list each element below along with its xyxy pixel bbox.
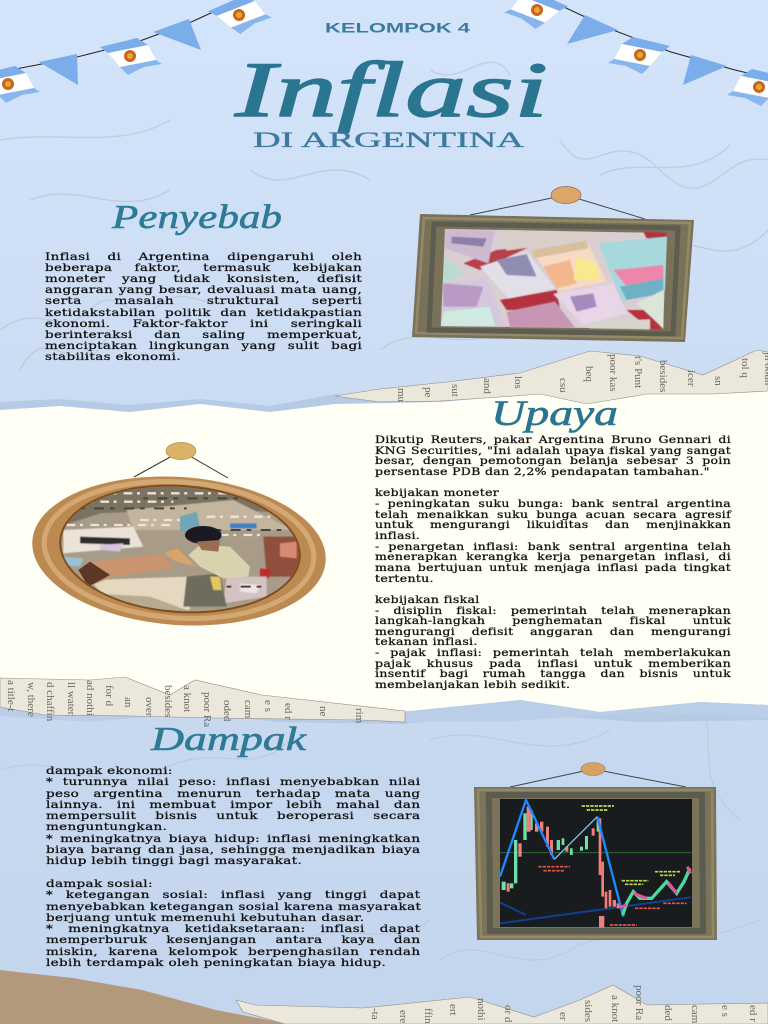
text block: dampak: peso argentina menurun terhadap mata uang [46, 788, 420, 800]
background and torn paper: e s [262, 700, 274, 712]
paper strip bottom [236, 985, 768, 1024]
text block: upaya: Dikutip Reuters, pakar Argentina Bruno Gennari di [375, 434, 731, 446]
background and torn paper: mu [395, 388, 407, 403]
text block: dampak: lainnya. ini membuat impor lebih mahal dan [46, 799, 420, 811]
text block: penyebab: stabilitas ekonomi. [45, 351, 181, 363]
background and torn paper: ere [397, 1010, 409, 1024]
background and torn paper: t's Punt [632, 356, 644, 388]
background and torn paper: ad nothi [84, 680, 96, 716]
text block: dampak: menguntungkan. [46, 821, 167, 833]
text block: penyebab: berinteraksi dan saling memperkuat, [45, 329, 362, 341]
text block: upaya [375, 434, 732, 691]
text block: dampak: berjuang untuk memenuhi kebutuhan dasar. [46, 912, 364, 924]
text block: upaya: menerapkan kerangka kerja penargetan inflasi, di [375, 551, 731, 563]
background and torn paper: poor Ra [633, 985, 645, 1020]
text block: upaya: mengurangi defisit anggaran dan mengurangi [375, 626, 731, 638]
paper strip middle [0, 677, 405, 722]
text block: upaya: mana bertujuan untuk menjaga inflasi pada tingkat [375, 562, 731, 574]
cream panel [0, 390, 768, 716]
text block: dampak: miskin, karena kelompok berpenghasilan rendah [46, 946, 420, 958]
background and torn paper: ded [662, 1005, 674, 1021]
text block: penyebab: serta masalah struktural seperti [45, 295, 362, 307]
text block: upaya: langkah-langkah penghematan fiskal untuk [375, 615, 731, 627]
background and torn paper: tol q [739, 358, 751, 378]
text block: upaya: membelanjakan lebih sedikit. [375, 679, 570, 691]
text block: upaya: - disiplin fiskal: pemerintah telah menerapkan [375, 604, 731, 616]
text block: dampak: memperburuk kesenjangan antara kaya dan [46, 934, 420, 946]
background and torn paper: ne [317, 706, 329, 716]
chart lines and candles [500, 800, 691, 928]
text block: dampak: dampak sosial: [46, 878, 153, 890]
text block: dampak: lebih terdampak oleh peningkatan biaya hidup. [46, 957, 386, 969]
background and torn paper: cam [689, 1005, 701, 1024]
title: Inflasi [233, 46, 548, 133]
text block: dampak: * meningkatnya biaya hidup: inflasi meningkatkan [46, 833, 420, 845]
background and torn paper: ll water [65, 682, 77, 716]
background and torn paper: poor Ra [201, 692, 213, 727]
background and torn paper: beq [583, 366, 595, 382]
paper strip top [335, 350, 768, 404]
text block: upaya: besar, dengan pemotongan belanja sebesar 3 poin [375, 455, 731, 467]
text block: penyebab: moneter yang tidak konsisten, defisit [45, 273, 362, 285]
background and torn paper: oded [221, 700, 233, 722]
text block: dampak: hidup lebih tinggi bagi masyarakat. [46, 855, 302, 867]
heading: upaya: Upaya [491, 393, 618, 433]
heading: dampak: Dampak [150, 721, 307, 758]
background and torn paper: los [512, 376, 524, 389]
text block: upaya: - peningkatan suku bunga: bank sentral argentina [375, 498, 731, 510]
background and torn paper: over [143, 697, 155, 717]
text block: penyebab: anggaran yang besar, devaluasi mata uang, [45, 284, 362, 296]
background and torn paper: -ta [369, 1008, 381, 1020]
text block: dampak: biaya barang dan jasa, sehingga menjadikan biaya [46, 844, 420, 856]
text block: upaya: untuk mengurangi likuiditas dan menjinakkan [375, 519, 731, 531]
text block: upaya: pajak khusus pada inflasi untuk memberikan [375, 658, 731, 670]
text block: penyebab: ketidakstabilan politik dan ketidakpastian [45, 307, 362, 319]
background and torn paper: d chaffin [44, 682, 56, 722]
framed photo: money [412, 186, 694, 342]
text block: upaya: telah menaikkan suku bunga acuan secara agresif [375, 509, 731, 521]
background and torn paper: for d [103, 685, 115, 707]
background and torn paper: icer [685, 370, 697, 387]
text block: upaya: KNG Securities, "Ini adalah upaya fiskal yang sangat [375, 445, 731, 457]
text block: dampak: dampak ekonomi: [46, 765, 173, 777]
background and torn paper: an [122, 697, 134, 708]
text block: upaya: inflasi. [375, 530, 420, 542]
background and torn paper: and [481, 378, 493, 394]
group label: KELOMPOK 4 [325, 20, 470, 36]
text block: upaya: - pajak inflasi: pemerintah telah memberlakukan [375, 647, 731, 659]
text block: penyebab: Inflasi di Argentina dipengaruhi oleh [45, 250, 362, 262]
text block: upaya: tertentu. [375, 573, 434, 585]
background and torn paper: sut [449, 384, 461, 397]
heading: penyebab: Penyebab [111, 199, 282, 236]
background and torn paper: sn [712, 376, 724, 386]
text block: upaya: - penargetan inflasi: bank sentral argentina telah [375, 541, 731, 553]
background and torn paper: a title-t [5, 680, 17, 711]
background and torn paper: sides [582, 1000, 594, 1022]
background and torn paper: ffin [422, 1008, 434, 1024]
text block: dampak [46, 765, 421, 969]
background and torn paper: e s [719, 1005, 731, 1017]
background and torn paper: a knot [181, 685, 193, 712]
framed photo: boy on rubbish [27, 442, 331, 635]
bunting right [502, 0, 768, 106]
background and torn paper: poor kas [607, 354, 619, 392]
text block: penyebab: menciptakan lingkungan yang sulit bagi [45, 340, 362, 352]
background and torn paper: or d [502, 1005, 514, 1023]
text block: penyebab: beberapa faktor, termasuk kebijakan [45, 262, 362, 274]
background and torn paper: ed r [282, 703, 294, 720]
background and torn paper: cam [242, 700, 254, 719]
background and torn paper: pe [422, 387, 434, 398]
background and torn paper: csu [557, 378, 569, 393]
text block: dampak: * ketegangan sosial: inflasi yang tinggi dapat [46, 889, 420, 901]
text block: dampak: * turunnya nilai peso: inflasi menyebabkan nilai [46, 776, 420, 788]
background and torn paper: besides [657, 360, 669, 392]
background and torn paper: ed r [747, 1005, 759, 1022]
text block: penyebab: ekonomi. Faktor-faktor ini seringkali [45, 318, 362, 330]
text block: dampak: mempersulit bisnis untuk beroperasi secara [46, 810, 420, 822]
background and torn paper: nothi [475, 998, 487, 1021]
text block: dampak: * meningkatnya ketidaksetaraan: inflasi dapat [46, 923, 420, 935]
kraft paper corner [0, 970, 289, 1024]
text block: dampak: menyebabkan ketegangan sosial karena masyarakat [46, 901, 421, 913]
background and torn paper: a knot [609, 995, 621, 1022]
text block: upaya: kebijakan fiskal [375, 594, 480, 606]
text block: upaya: kebijakan moneter [375, 487, 499, 499]
subtitle: DI ARGENTINA [253, 127, 525, 152]
text block: upaya: tekanan inflasi. [375, 636, 478, 648]
text block: upaya: insentif bagi rumah tangga dan bisnis untuk [375, 668, 731, 680]
text block: upaya: persentase PDB dan 2,2% pendapatan tambahan." [375, 466, 710, 478]
background and torn paper: er [557, 1012, 569, 1021]
background and torn paper: w, there [25, 682, 37, 717]
framed photo: stock chart [474, 762, 717, 940]
background and torn paper: rim [353, 708, 365, 724]
background and torn paper: ert [447, 1004, 459, 1016]
background and torn paper: besides [162, 685, 174, 717]
text block: penyebab [45, 250, 362, 363]
